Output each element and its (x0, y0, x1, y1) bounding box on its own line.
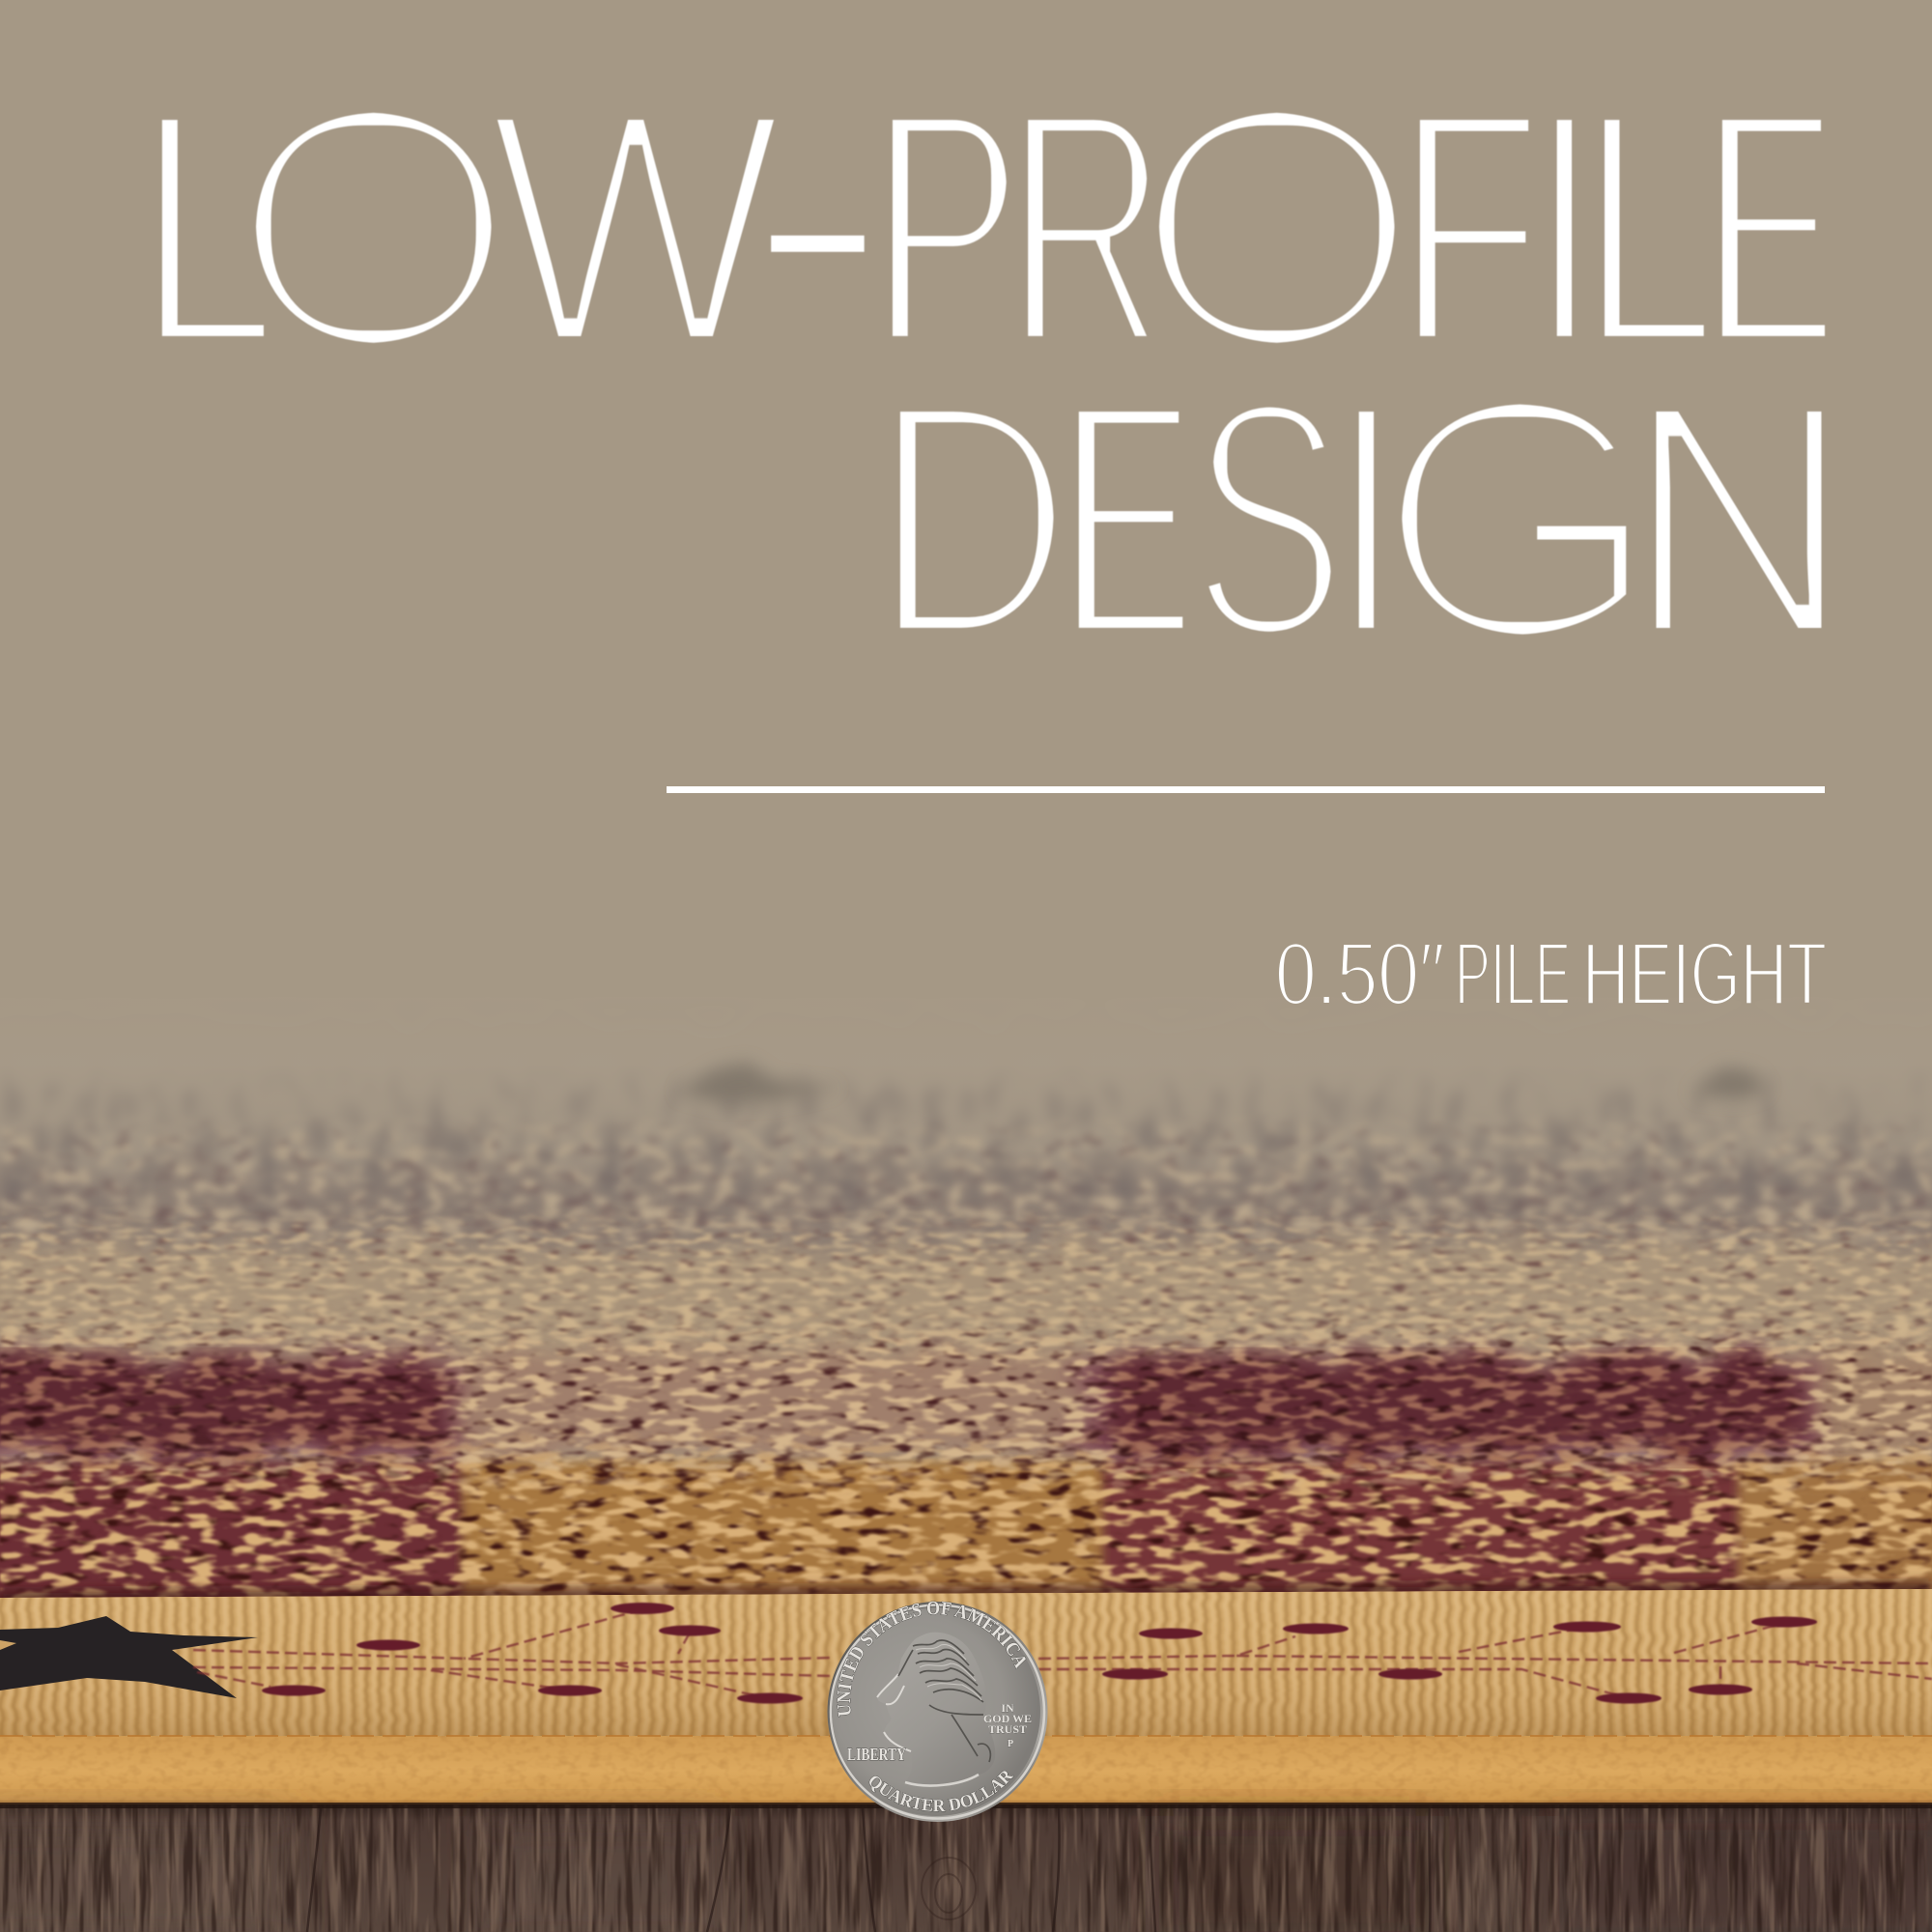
burgundy tint patches (0, 1357, 1797, 1459)
pile texture far (0, 1203, 1932, 1367)
title line 2: G (1373, 327, 1664, 711)
ribbed rug border (0, 1575, 1932, 1758)
coin legend: motto: TRUST (988, 1722, 1027, 1736)
title line 2: D (872, 332, 1072, 707)
coin legend: motto: IN (1001, 1701, 1014, 1715)
title line 1: O (228, 35, 520, 419)
coin legend: motto: GOD WE (983, 1712, 1032, 1725)
coin legend: motto (983, 1701, 1032, 1749)
title line 1: F (1397, 40, 1541, 414)
title line 1: O (1131, 35, 1423, 419)
coin rim (827, 1602, 1047, 1822)
berry dots (262, 1603, 1817, 1704)
title line 1: P (871, 41, 1021, 414)
title line 2: E (1062, 332, 1192, 707)
rug pile photo area (0, 1059, 1932, 1598)
quarter dollar coin (827, 1602, 1047, 1822)
title line 1: E (1705, 41, 1834, 415)
coin legend: top arc: UNITED STATES OF AMERICA (837, 1602, 1026, 1718)
black star motif (0, 1616, 258, 1698)
portrait bust (877, 1633, 995, 1785)
coin legend: motto: P (1008, 1739, 1013, 1749)
subtitle: pile height: PILE (1455, 923, 1571, 1024)
rug binding edge (0, 1736, 1932, 1806)
atmospheric fade to background (0, 995, 1932, 1323)
title line 1: - (752, 0, 884, 433)
coin face (832, 1607, 1040, 1816)
divider rule (667, 786, 1825, 793)
title line 2 (872, 327, 1854, 711)
title line 1: R (1007, 41, 1166, 415)
stitched berry vine (193, 1609, 1932, 1698)
coin legend: liberty: LIBERTY (847, 1745, 906, 1764)
pile texture near (0, 1425, 1932, 1598)
dark seam at pile base (0, 1581, 1932, 1605)
subtitle: pile height: 0.50″ (1275, 923, 1445, 1024)
coin legend: bottom arc: QUARTER DOLLAR (869, 1770, 1014, 1812)
pile colour patches (0, 1147, 1932, 1466)
title line 1: I (1518, 40, 1611, 414)
title line 1: L (1580, 42, 1716, 415)
pile texture middle (0, 1304, 1932, 1497)
title line 1: W (487, 43, 786, 412)
blurred distant streaks (3, 1087, 1924, 1219)
title line 2: N (1624, 335, 1854, 702)
near pile colour patches (0, 1455, 1932, 1598)
background panel (0, 0, 1932, 1256)
title line 2: I (1320, 331, 1413, 706)
subtitle: pile height (1275, 923, 1827, 1024)
title line 2: S (1192, 331, 1345, 708)
title line 1: L (138, 40, 275, 414)
hair waves (898, 1640, 990, 1762)
title line 1 (138, 0, 1834, 433)
subtitle: pile height: HEIGHT (1582, 923, 1827, 1024)
distant blurred stars (676, 1063, 1768, 1103)
pile texture farther (0, 1129, 1932, 1250)
wood floor (0, 1803, 1932, 1932)
